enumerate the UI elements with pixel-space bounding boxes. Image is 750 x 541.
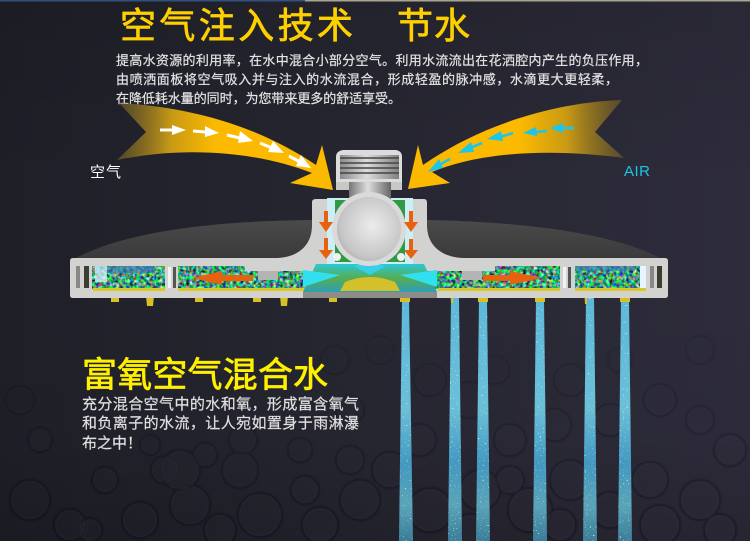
label: AIR: AIR (624, 163, 650, 180)
lower text block: 布之中！ (82, 435, 142, 452)
title: 节水 (397, 5, 470, 46)
dome top of shower panel (76, 220, 660, 258)
cyan air flow arrows (428, 123, 574, 172)
center water chamber (303, 198, 437, 292)
title: 空气注入技术 (120, 5, 353, 46)
cavity right (415, 266, 662, 291)
intro text block: 提高水资源的利用率，在水中混合小部分空气。利用水流流出在花洒腔内产生的负压作用， (116, 53, 648, 68)
water streams (399, 298, 632, 541)
orange water flow arrows (319, 211, 418, 259)
intro text block: 由喷洒面板将空气吸入并与注入的水流混合，形成轻盈的脉冲感，水滴更大更轻柔， (116, 72, 618, 87)
arrow: air entering from right (408, 100, 624, 189)
arrow: air entering from left (117, 103, 333, 190)
white air flow arrows (160, 125, 311, 168)
lower text block (82, 395, 359, 452)
threaded connector (336, 150, 402, 200)
lower plate (303, 292, 437, 298)
lower text block: 充分混合空气中的水和氧，形成富含氧气 (82, 395, 359, 413)
label: 空气: 空气 (90, 164, 121, 181)
background bubbles (54, 425, 746, 541)
cavity left (76, 266, 305, 291)
lower text block: 和负离子的水流，让人宛如置身于雨淋瀑 (82, 415, 359, 432)
subheading: 富氧空气混合水 (82, 356, 328, 395)
shower head cross-section (70, 150, 668, 306)
ball joint (332, 192, 406, 266)
intro text block (116, 53, 648, 106)
intro text block: 在降低耗水量的同时，为您带来更多的舒适享受。 (116, 91, 401, 106)
title (120, 5, 470, 46)
panel body (70, 199, 668, 298)
nozzles (111, 288, 630, 306)
